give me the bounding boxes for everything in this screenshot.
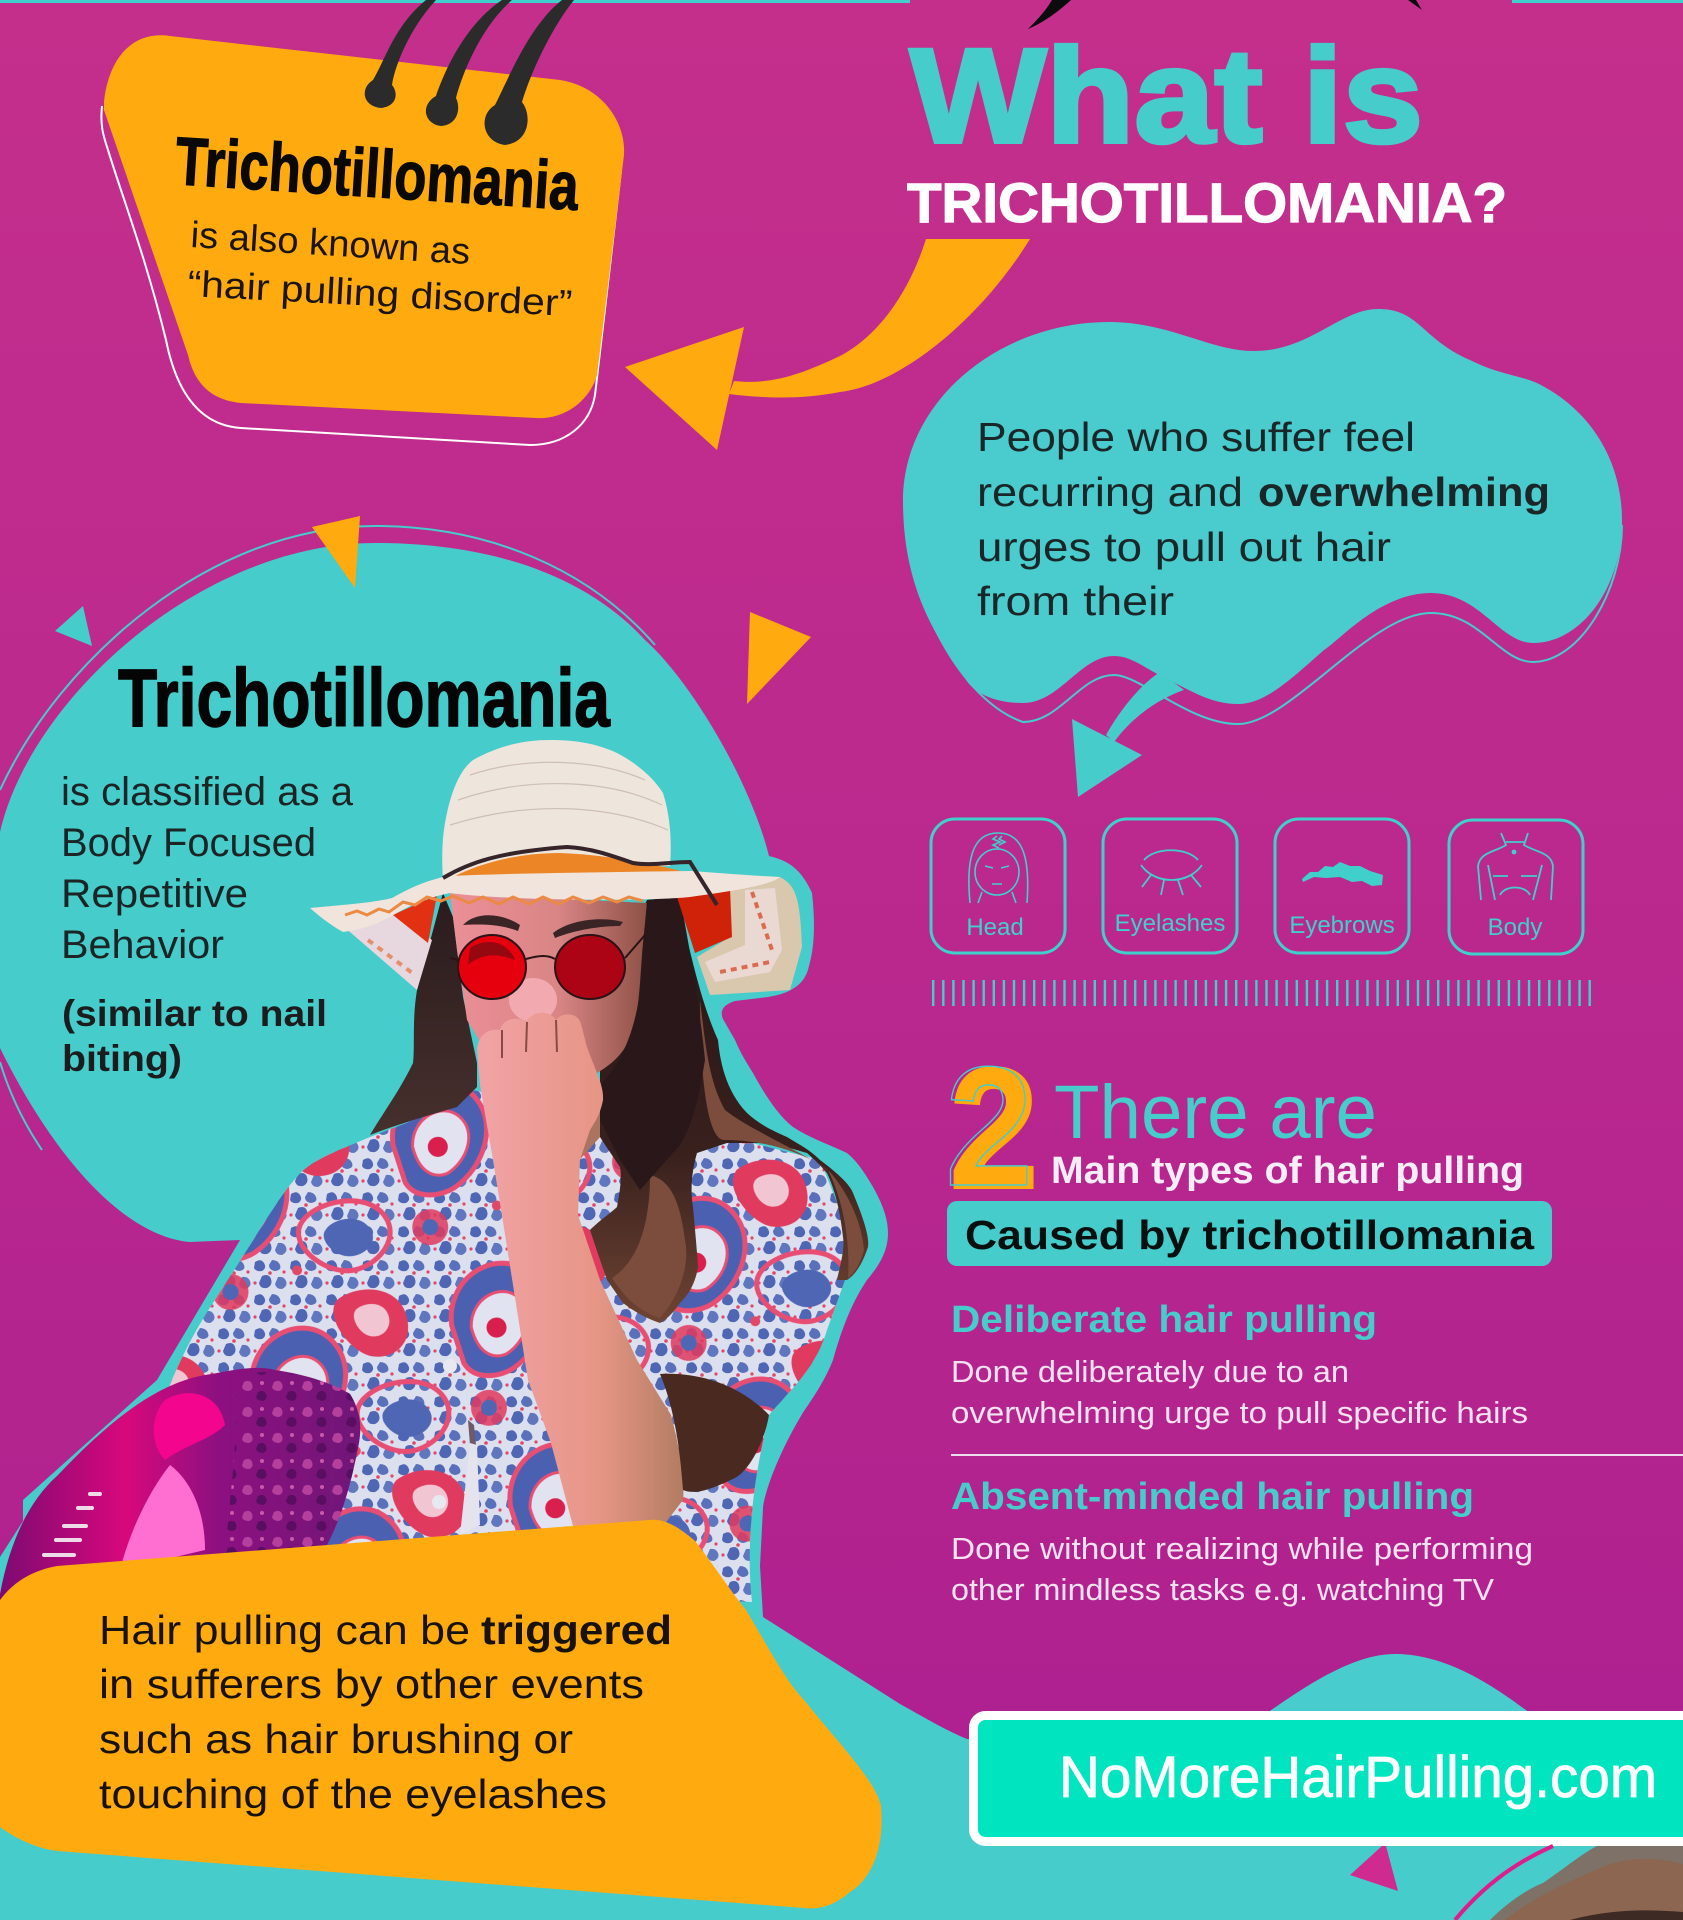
shirt placket [432,1359,480,1535]
similar note [62,993,327,1079]
classification text: Repetitive [61,872,248,916]
similar note: (similar to nail [62,993,327,1034]
there are: There are [1054,1070,1377,1155]
pink inflatable [0,1368,360,1610]
classification text [61,770,354,967]
neck [550,1060,605,1165]
absent-minded text [951,1531,1533,1607]
web address box [974,1716,1683,1842]
hat brim [0,847,802,1610]
absent-minded text: Done without realizing while performing [951,1531,1533,1566]
underbrim left [343,915,432,990]
main types: Main types of hair pulling [1051,1150,1524,1192]
lower left arc outline [0,1062,42,1150]
brow right [553,919,623,938]
hair main right [590,897,868,1323]
hat band [447,853,692,880]
blob text: recurring and [977,469,1243,515]
blob text: triggered [481,1607,672,1653]
blob text: urges to pull out hair [977,524,1391,570]
blob body [903,309,1622,704]
title [907,22,1507,234]
red underbrim left [393,895,437,943]
arrow: orange to card [625,239,1030,450]
types section [945,1032,1683,1607]
blob text: overwhelming [1258,469,1550,515]
blob text: People who suffer feel [977,414,1415,460]
brow left [463,915,520,931]
hair right front [600,897,705,1190]
blob outline [905,520,1622,724]
big numeral 2: 2 [945,1032,1033,1222]
classification text: is classified as a [61,770,354,814]
left panel text [61,653,611,1079]
icon: head: Head [966,914,1024,941]
nose highlight [509,978,557,1022]
similar note: biting) [62,1038,182,1079]
underbrim right [697,877,802,995]
icon: head [931,819,1065,953]
title line 2: TRICHOTILLOMANIA? [907,171,1507,234]
icon: eyelashes [1103,819,1237,953]
big numeral 2: 2 [950,1034,1038,1224]
teal backdrop blob behind the woman [0,543,1683,1920]
absent-minded heading: Absent-minded hair pulling [951,1476,1474,1518]
card white outline [101,106,621,445]
icon: body [1449,820,1583,954]
caused by pill [947,1201,1552,1266]
icon: eyebrows [1275,819,1409,953]
icon: eyebrows: Eyebrows [1289,912,1395,939]
teal bump behind web address [1257,1654,1539,1720]
card line 2: “hair pulling disorder” [187,263,573,324]
hat crown [442,740,671,880]
finger creases [502,1020,557,1058]
hair highlight strands [612,1000,864,1318]
shirt [120,1090,848,1602]
hair root callout: orange card [101,0,624,445]
brim embroidery [345,896,643,915]
tick bar [932,980,1597,1006]
deliberate text: overwhelming urge to pull specific hairs [951,1395,1528,1430]
card heading: Trichotillomania [173,123,582,225]
teal speech blob [903,309,1622,724]
orange trigger blob [0,1520,882,1908]
absent-minded text: other mindless tasks e.g. watching TV [951,1572,1494,1607]
deliberate heading: Deliberate hair pulling [951,1299,1377,1341]
hair strands [365,0,574,145]
triangle: top orange [312,516,360,588]
blob text: such as hair brushing or [99,1716,573,1762]
web address box: NoMoreHairPulling.com [1059,1745,1657,1810]
classification text: Body Focused [61,821,316,865]
sunglasses [450,935,645,999]
classification text: Behavior [61,923,224,967]
triangle: small teal [55,606,92,646]
card line 1: is also known as [190,214,471,272]
crown weave lines [450,762,668,830]
icon: eyelashes: Eyelashes [1115,910,1225,937]
thin arc outline around backdrop [0,526,655,790]
hand and forearm [477,1013,683,1530]
triangle: right orange [747,612,811,704]
arc: magenta bottom [1455,1846,1553,1920]
face [450,893,647,1075]
woman illustration [0,740,1683,1920]
blob text: in sufferers by other events [99,1661,644,1707]
blob text: Hair pulling can be [99,1607,470,1653]
black hair tips at top [1028,0,1422,29]
triangle: magenta bottom [1350,1846,1398,1891]
title line 1: What is [910,22,1423,171]
panel heading: Trichotillomania [118,653,611,744]
card body [104,35,624,418]
blob text [99,1607,672,1817]
head of hair bottom right [1490,1846,1683,1920]
hat string [443,847,717,905]
blob text: from their [977,578,1174,624]
brim top [310,871,780,932]
deliberate text: Done deliberately due to an [951,1354,1349,1389]
icon: body: Body [1488,914,1542,941]
blob text: touching of the eyelashes [99,1771,607,1817]
inflatable stitches [44,1494,100,1555]
underarm shadow [660,1374,769,1492]
arrow: teal down to icons [1072,672,1184,797]
red underbrim right [677,888,732,953]
caused by pill: Caused by trichotillomania [965,1212,1535,1258]
hair left [370,893,477,1135]
deliberate text [951,1354,1528,1430]
blob text [977,414,1550,624]
